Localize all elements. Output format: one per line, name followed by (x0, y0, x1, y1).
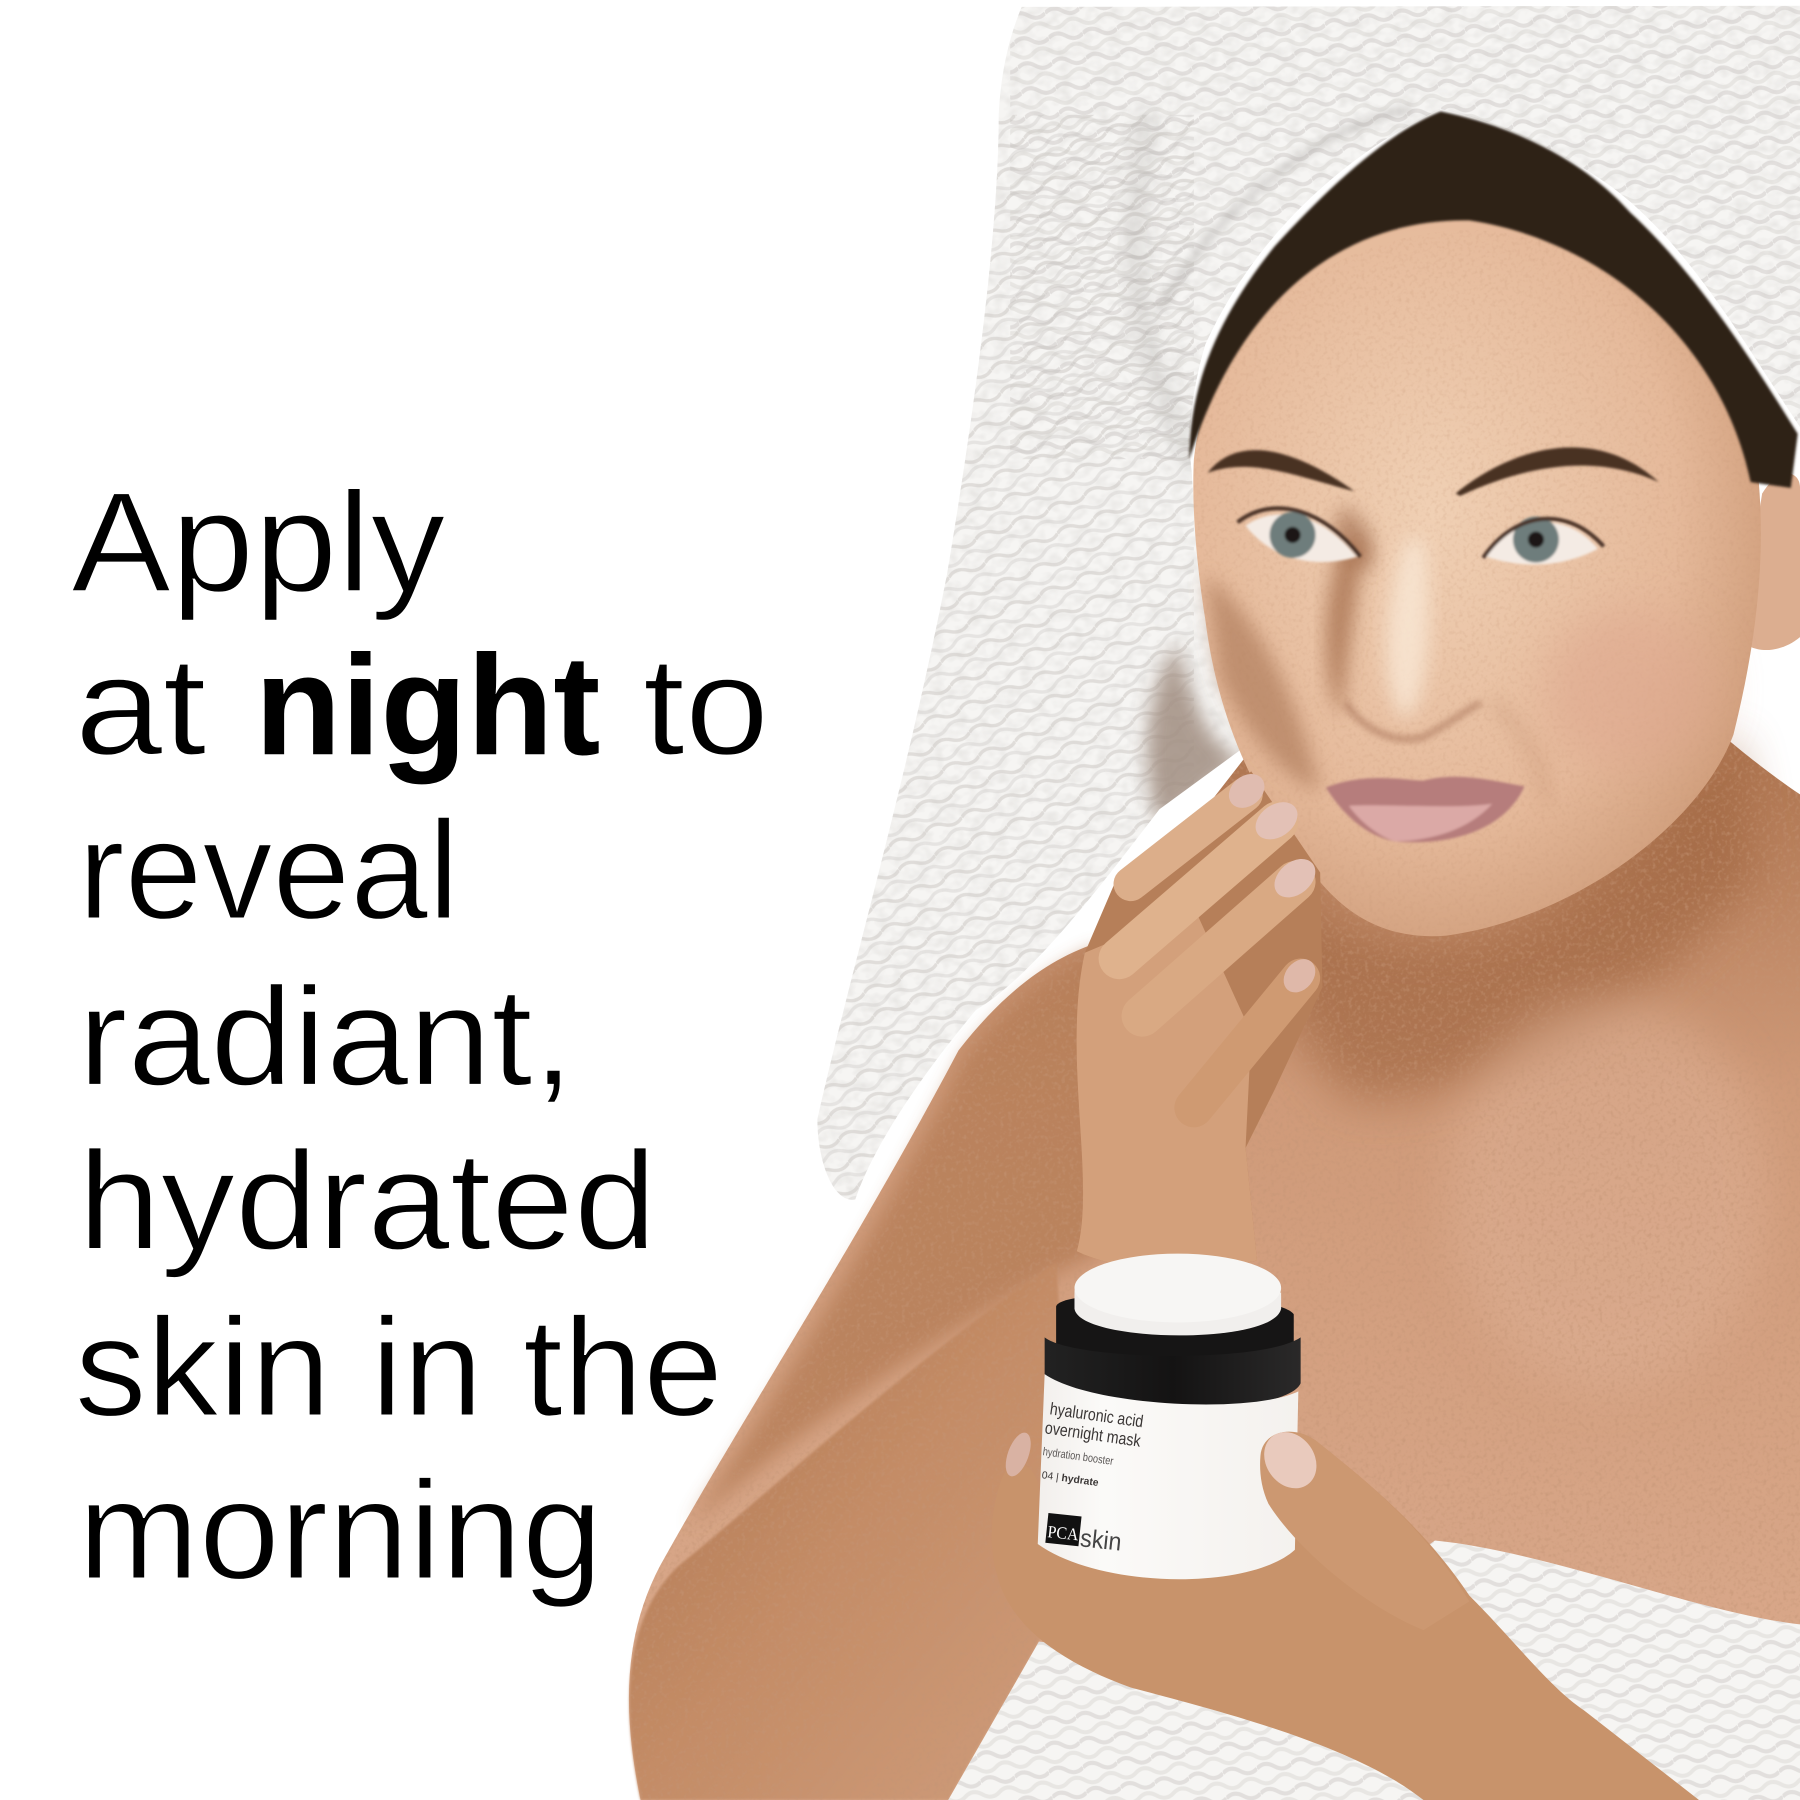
jar label text: 04 | hydrate (1041, 1470, 1099, 1489)
hand backing (1077, 771, 1322, 1270)
upper hand (1077, 767, 1323, 1270)
lips (1326, 777, 1524, 842)
forearm (629, 1263, 1079, 1800)
chest highlight (1446, 999, 1768, 1389)
skin freckles (632, 746, 1800, 1725)
thumb nail (1253, 1422, 1327, 1498)
brand logo: PCA (1047, 1522, 1080, 1544)
smile line (1492, 700, 1545, 804)
face freckles (1193, 230, 1761, 936)
towel wrap at chest (948, 1541, 1800, 1800)
jar body (1038, 1374, 1298, 1579)
headline text: at (75, 627, 207, 784)
nose base (1345, 703, 1481, 739)
jar label text: hyaluronic acid (1049, 1398, 1145, 1431)
fingertip nail (1001, 1429, 1036, 1480)
jar label text (1038, 1398, 1145, 1494)
neck shadow (1263, 735, 1756, 1102)
nose highlight (1386, 540, 1429, 718)
ear (1739, 474, 1800, 650)
finger 2 (1119, 822, 1278, 959)
nail 3 (1267, 851, 1323, 905)
eye right (1483, 517, 1604, 565)
palm (1077, 907, 1257, 1270)
headline text: skin in the (75, 1288, 723, 1445)
eyebrow left (1208, 450, 1355, 491)
eye left (1238, 508, 1360, 562)
nose side shadow (1326, 540, 1366, 717)
nail 2 (1249, 794, 1305, 847)
turban ridges (1010, 0, 1800, 459)
nail 1 (1222, 767, 1271, 815)
towel fold shadows (1135, 115, 1194, 471)
shoulder, arm and chest (629, 712, 1800, 1800)
finger 3 (1142, 882, 1295, 1016)
towel texture (804, 0, 1800, 1217)
finger 1 (1131, 794, 1246, 884)
headline text: night (255, 626, 600, 785)
thumb (1253, 1422, 1469, 1630)
product jar (1038, 1254, 1301, 1579)
jar collar (1056, 1294, 1294, 1372)
jar label text: hydration booster (1042, 1446, 1114, 1468)
hanging towel ridges (804, 115, 1194, 1217)
cheek shadow (1205, 574, 1320, 792)
eye socket shadow (1334, 505, 1373, 569)
photo: woman with towel and product (620, 0, 1800, 1800)
finger 4 (1194, 978, 1301, 1108)
brand logo (1045, 1513, 1124, 1557)
headline text: morning (78, 1451, 603, 1608)
headline text: radiant, (78, 958, 574, 1115)
headline text (71, 463, 769, 1608)
hair (1189, 111, 1798, 488)
cheek blush (1544, 608, 1716, 769)
nail 4 (1277, 953, 1322, 999)
chest towel texture (948, 1541, 1800, 1800)
headline text: reveal (78, 791, 459, 948)
headline text: to (643, 627, 769, 784)
upper arm shading (689, 947, 1102, 1527)
jar inner cap (1074, 1254, 1281, 1335)
headline text: hydrated (78, 1122, 657, 1279)
face (1193, 207, 1761, 936)
brand logo: skin (1079, 1524, 1123, 1557)
jar lid band (1045, 1337, 1301, 1408)
eyebrow right (1456, 447, 1659, 496)
jar label text: overnight mask (1044, 1417, 1142, 1451)
head towel (817, 6, 1800, 1200)
headline text: Apply (71, 463, 445, 622)
lower hand (992, 1432, 1699, 1800)
